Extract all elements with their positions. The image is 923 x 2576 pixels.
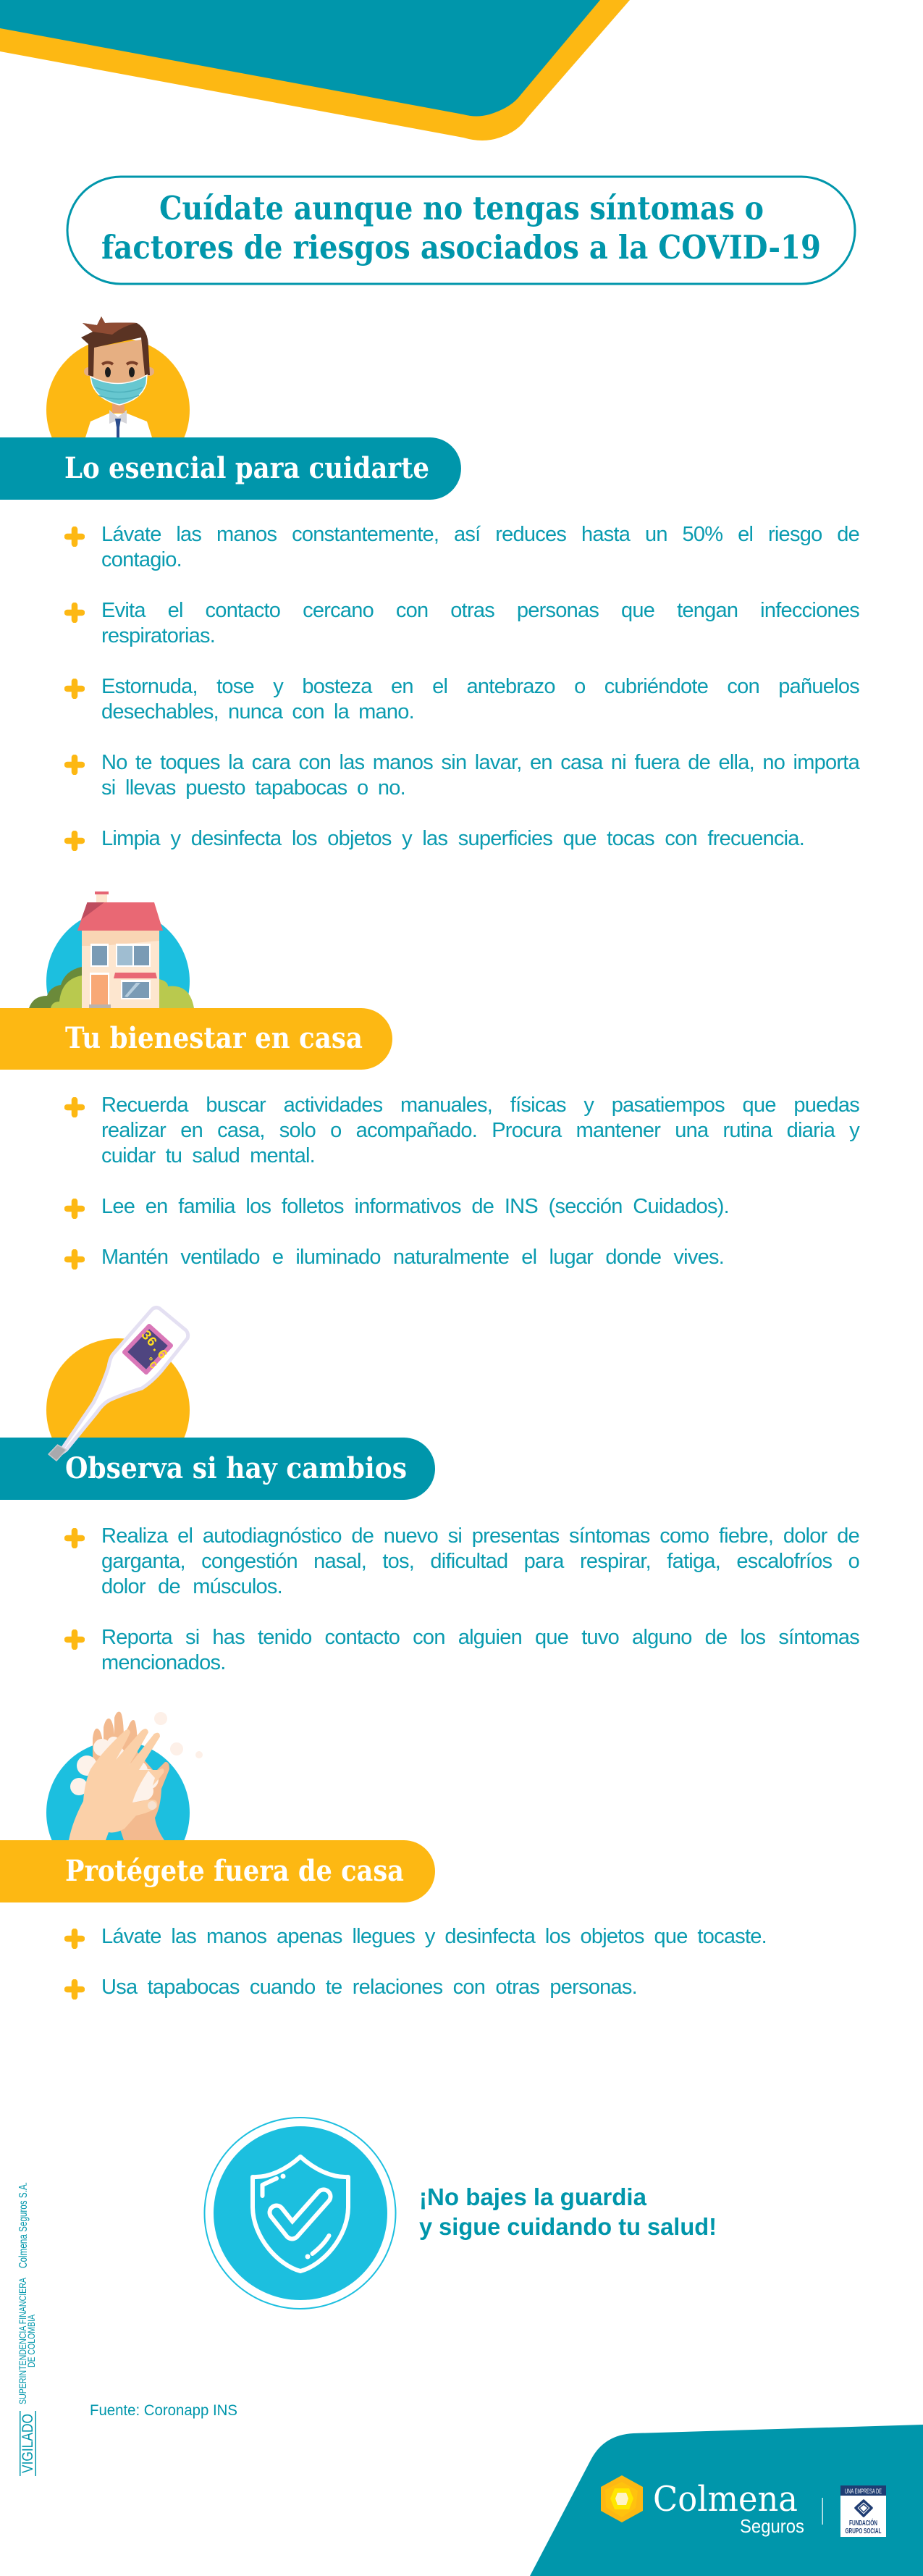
icon: shield badge [204, 2118, 395, 2309]
closing message: ¡No bajes la guardia [419, 2183, 647, 2210]
bullet: estornudar [64, 675, 859, 723]
icon: house [29, 891, 194, 1053]
title box: factores de riesgos asociados a la COVID-19 [101, 228, 821, 267]
bullet: autodiagnóstico: dolor de músculos. [101, 1575, 282, 1598]
section bar: Protégete fuera de casa [0, 1840, 435, 1902]
icon: thermometer: 36.6 [137, 1327, 171, 1363]
logo: Colmena wordmark: Colmena [653, 2479, 798, 2520]
icon: thermometer [49, 1308, 188, 1461]
bullet: ventilar el hogar: Mantén ventilado e iluminado naturalmente el lugar donde vives. [101, 1246, 724, 1269]
bullet: no tocarse la cara [64, 751, 860, 800]
thermometer backing circle [46, 1338, 190, 1482]
bullet: usar tapabocas: Usa tapabocas cuando te relaciones con otras personas. [101, 1976, 637, 1999]
logo: Fundación Grupo Social [840, 2485, 886, 2537]
top banner [0, 0, 630, 140]
bullet: autodiagnóstico: garganta, congestión nasal, tos, dificultad para respirar, fatiga, escalofríos o [101, 1550, 859, 1573]
section bar: Lo esencial para cuidarte [0, 437, 461, 500]
bullet: contacto cercano: respiratorias. [101, 624, 215, 647]
bullet: actividades en casa: cuidar tu salud mental. [101, 1144, 315, 1167]
bullet: folletos INS: Lee en familia los folletos informativos de INS (sección Cuidados). [101, 1195, 729, 1218]
section bar: Lo esencial para cuidarte: Lo esencial para cuidarte [64, 451, 429, 485]
bullet: lavado de manos: Lávate las manos constantemente, así reduces hasta un 50% el riesgo de [101, 523, 859, 546]
icon: thermometer: °C [142, 1355, 159, 1372]
title box [67, 177, 855, 284]
section bar: Tu bienestar en casa [0, 1008, 392, 1070]
footer band with logos [530, 2425, 923, 2576]
vertical legal text: Colmena Seguros S.A. [17, 2182, 30, 2268]
logo: Colmena wordmark: Seguros [740, 2515, 804, 2537]
logo: Colmena hexagon [601, 2475, 643, 2522]
title box: Cuídate aunque no tengas síntomas o [159, 189, 764, 227]
section bar: Tu bienestar en casa: Tu bienestar en casa [65, 1021, 363, 1055]
logo: Fundación Grupo Social: UNA EMPRESA DE [845, 2488, 882, 2495]
section bar: Observa si hay cambios [0, 1438, 435, 1500]
bullet: contacto cercano [64, 599, 859, 647]
bullet: contacto cercano: Evita el contacto cercano con otras personas que tengan infecciones [101, 599, 859, 622]
bullet: autodiagnóstico [64, 1524, 859, 1598]
icon: man with mask [46, 316, 190, 482]
closing message: y sigue cuidando tu salud! [419, 2213, 717, 2240]
icon: washing hands [46, 1712, 203, 1884]
vertical legal text: VIGILADO [20, 2414, 36, 2473]
vertical legal text [17, 2182, 37, 2476]
logo: Fundación Grupo Social: FUNDACIÓN [849, 2518, 877, 2527]
bullet: actividades en casa: Recuerda buscar actividades manuales, físicas y pasatiempos que puedas [101, 1094, 859, 1117]
bullet: lavado de manos [64, 523, 859, 571]
bullet: lavado de manos: contagio. [101, 548, 182, 571]
bullet: no tocarse la cara: si llevas puesto tapabocas o no. [101, 776, 405, 800]
bullet: reportar contacto: mencionados. [101, 1651, 226, 1674]
logo: Fundación Grupo Social: GRUPO SOCIAL [846, 2527, 882, 2535]
bullet: lavarse al llegar: Lávate las manos apenas llegues y desinfecta los objetos que tocaste. [101, 1925, 767, 1948]
bullet: reportar contacto [64, 1626, 859, 1674]
vertical legal text: DE COLOMBIA [25, 2315, 37, 2367]
bullet: actividades en casa [64, 1094, 860, 1167]
bullet: no tocarse la cara: No te toques la cara con las manos sin lavar, en casa ni fuera de ella, no importa [101, 751, 859, 774]
bullet: estornudar: Estornuda, tose y bosteza en el antebrazo o cubriéndote con pañuelos [101, 675, 859, 698]
closing message [419, 2183, 717, 2240]
bullet: autodiagnóstico: Realiza el autodiagnóstico de nuevo si presentas síntomas como fiebre, dolor de [101, 1524, 859, 1548]
source note: Fuente: Coronapp INS [90, 2402, 237, 2419]
bullet: actividades en casa: realizar en casa, solo o acompañado. Procura mantener una rutina diaria y [101, 1119, 859, 1142]
section bar: Protégete fuera de casa: Protégete fuera de casa [65, 1854, 404, 1888]
bullet: reportar contacto: Reporta si has tenido contacto con alguien que tuvo alguno de los síntomas [101, 1626, 859, 1649]
bullet: estornudar: desechables, nunca con la mano. [101, 700, 414, 723]
vertical legal text: SUPERINTENDENCIA FINANCIERA [17, 2278, 28, 2404]
logo: Colmena wordmark [653, 2479, 804, 2537]
section title: Observa si hay cambios: Observa si hay cambios [65, 1451, 407, 1485]
bullet: limpiar superficies: Limpia y desinfecta los objetos y las superficies que tocas con frecuencia. [101, 827, 804, 850]
